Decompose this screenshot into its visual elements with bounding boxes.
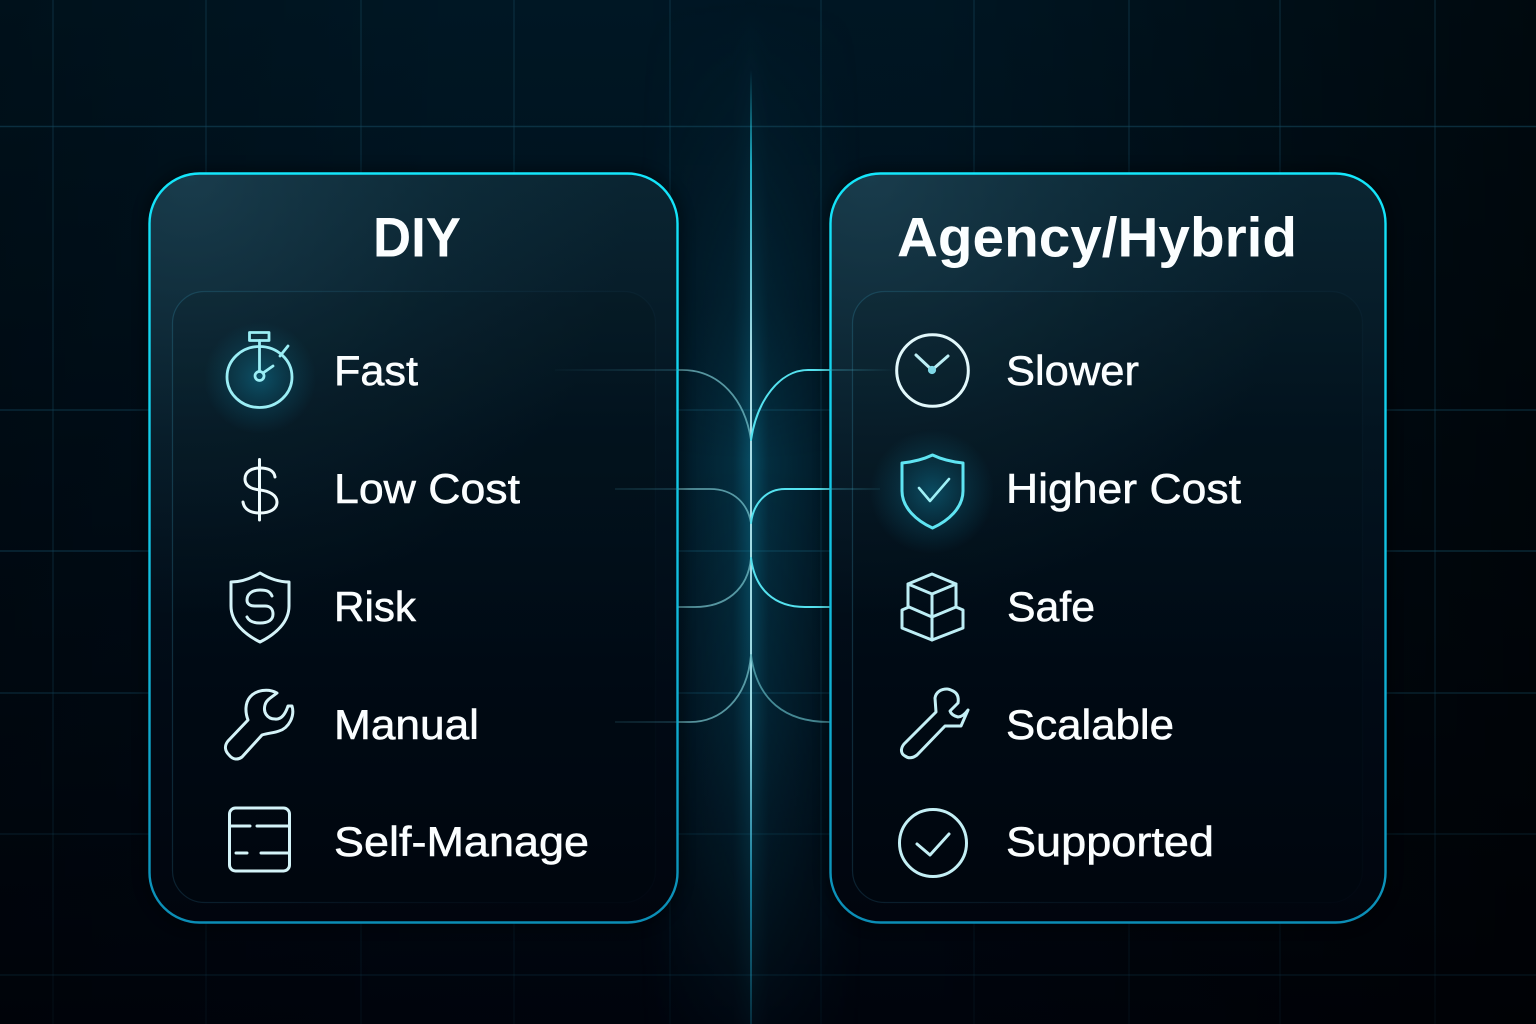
row: Low Cost [243,460,520,520]
label: Supported: Supported [1006,818,1214,865]
icon: circled check [900,810,966,876]
label: Higher Cost: Higher Cost [1006,465,1241,512]
row: Scalable [901,689,1174,758]
row: Self-Manage [230,808,589,871]
label: Low Cost: Low Cost [334,465,520,512]
panel: Agency/Hybrid [830,174,1386,922]
panel: DIY [150,174,678,922]
central vertical line [750,70,752,1024]
icon: stopwatch [204,322,316,434]
icon: dollar sign [243,460,277,520]
label: Manual: Manual [334,701,479,748]
row: Slower [897,335,1139,406]
row: Manual [225,690,479,759]
icon: clock [897,335,968,406]
icon: shield with S [231,573,289,642]
label: Self-Manage: Self-Manage [334,818,589,865]
label: Safe: Safe [1007,583,1095,630]
inner panel: Agency/Hybrid [852,292,1362,902]
faint row connectors: Agency/Hybrid [830,370,895,489]
icon: wrench narrow [901,689,968,758]
connector curves [678,370,829,722]
row: Risk [231,573,417,642]
faint row connectors: DIY [555,370,678,722]
row: Supported [900,810,1214,876]
row: Fast [204,322,418,434]
heading: DIY: DIY [373,206,461,268]
icon: shield with check [870,430,994,554]
row: Higher Cost [870,430,1241,554]
connector: Agency rows to centre [751,370,829,722]
label: Slower: Slower [1006,347,1139,394]
inner panel: DIY [172,292,656,902]
icon: wrench [225,690,293,759]
label: Scalable: Scalable [1006,701,1174,748]
label: Risk: Risk [334,583,417,630]
row: Safe [902,574,1095,640]
label: Fast: Fast [334,347,418,394]
icon: window panel [230,808,290,871]
icon: stacked cubes [902,574,963,640]
central glow [679,97,829,1024]
heading: Agency/Hybrid: Agency/Hybrid [897,206,1297,268]
connector: DIY rows to centre [678,370,751,722]
